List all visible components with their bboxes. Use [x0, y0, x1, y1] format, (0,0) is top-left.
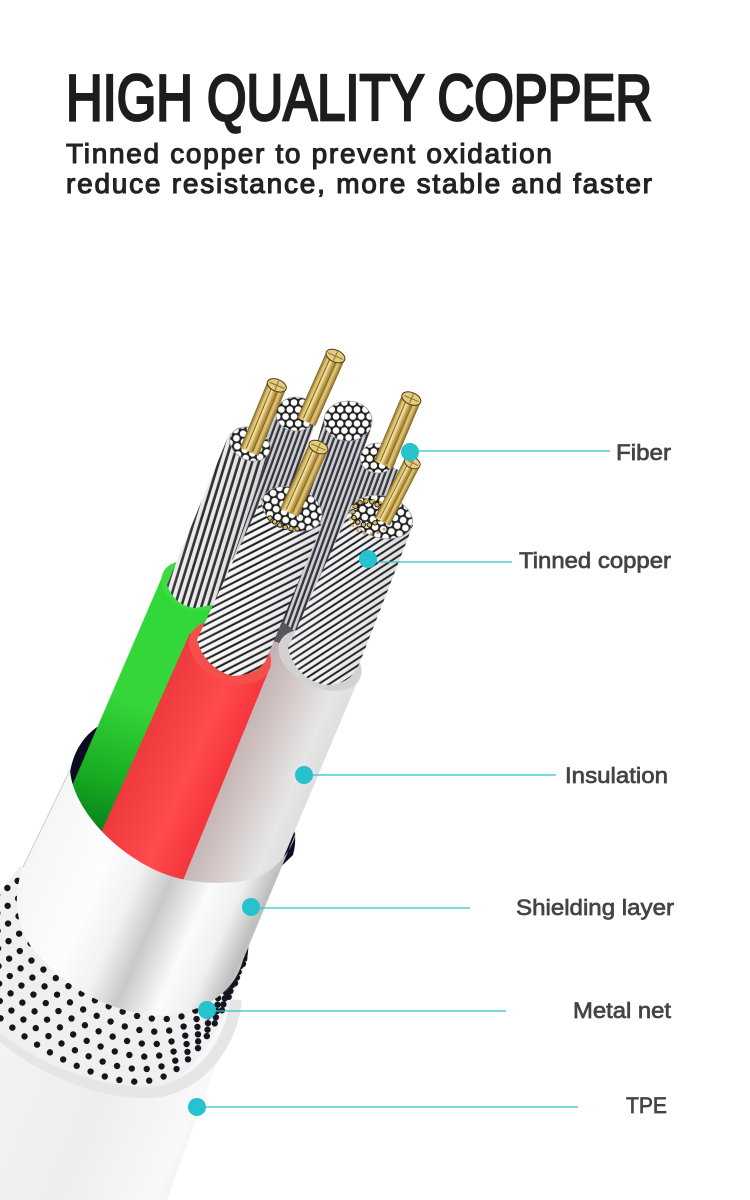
white wire: [168, 489, 417, 890]
callout: Insulation: [295, 763, 668, 788]
tinned strand on white wire: [288, 505, 413, 685]
tinned strand on green wire: [167, 432, 268, 608]
shield interior, dark slivers: [69, 727, 295, 885]
shielding layer: [17, 770, 297, 1016]
callout: Insulation: Insulation: [565, 763, 668, 788]
callout: TPE: [188, 1093, 667, 1118]
cable illustration: [0, 347, 423, 1200]
subtitle: Tinned copper to prevent oxidation: [66, 138, 552, 169]
callout: TPE: TPE: [626, 1093, 667, 1118]
green wire: [72, 421, 276, 860]
tinned strand on red wire: [197, 498, 322, 676]
red wire: [100, 479, 328, 900]
dark core between strands: [250, 500, 350, 650]
TPE outer jacket: [0, 970, 238, 1200]
gold fiber pins: [240, 347, 423, 525]
callout: Metal net: [198, 998, 671, 1023]
callout: Shielding layer: [242, 895, 674, 920]
callout: Fiber: [401, 440, 671, 465]
back strand: centre: [268, 401, 372, 632]
callout: Shielding layer: Shielding layer: [516, 895, 674, 920]
metal net: [0, 866, 248, 1086]
callout: Fiber: Fiber: [616, 440, 671, 465]
callout: Metal net: Metal net: [573, 998, 671, 1023]
callout: Tinned copper: [359, 548, 671, 573]
back strand: left: [222, 397, 316, 565]
callout: Tinned copper: Tinned copper: [519, 548, 671, 573]
back strand: right: [300, 443, 398, 620]
subtitle: [66, 138, 652, 199]
subtitle: reduce resistance, more stable and faster: [66, 168, 652, 199]
